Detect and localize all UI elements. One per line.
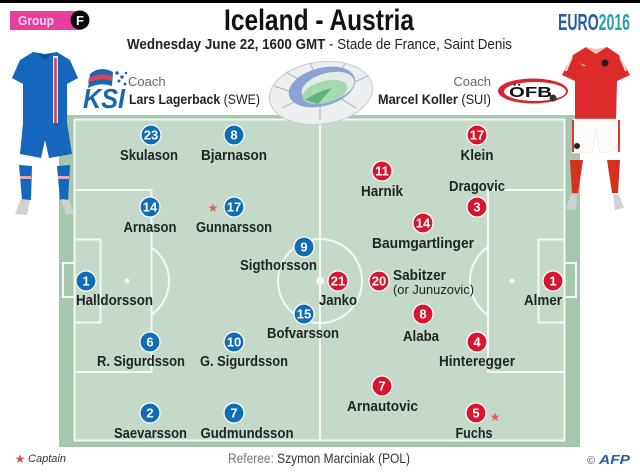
group badge [10, 10, 90, 30]
icon: captain star: ★ [208, 201, 218, 215]
logo: KSI: KSI [83, 83, 126, 114]
player: Klein: Klein [460, 148, 494, 164]
player: Sigthorsson [240, 237, 317, 274]
player: Janko: Janko [319, 293, 357, 309]
player: Bofvarsson: Bofvarsson [267, 326, 339, 342]
player: Bjarnason: Bjarnason [201, 148, 267, 164]
football pitch [59, 115, 580, 447]
legend: captain: Captain [28, 453, 66, 465]
referee: Referee: Szymon Marciniak (POL) [228, 451, 410, 466]
player: R. Sigurdsson [97, 332, 185, 370]
player: Alaba: Alaba [403, 329, 440, 345]
logo: OFB [498, 78, 568, 104]
team: Iceland [76, 125, 339, 442]
player: Saevarsson: Saevarsson [114, 426, 187, 442]
player: Gudmundsson: Gudmundsson [200, 426, 294, 442]
player: Gunnarsson: 17 [227, 200, 241, 214]
player: G. Sigurdsson [200, 332, 288, 370]
match details: Wednesday June 22, 1600 GMT - Stade de France, Saint Denis [127, 36, 512, 53]
player: R. Sigurdsson: 6 [146, 334, 154, 350]
kit: Austria [562, 47, 630, 210]
player: Almer: Almer [524, 293, 562, 309]
player: Fuchs: 5 [472, 406, 480, 420]
team: Austria [319, 125, 563, 442]
player: Almer: 1 [549, 274, 557, 288]
player: Sabitzer: Sabitzer [393, 268, 446, 284]
coach: Iceland: Coach [128, 74, 166, 89]
player: Saevarsson: 2 [146, 406, 154, 420]
player: Sabitzer: 20 [372, 274, 386, 288]
player: Dragovic [449, 179, 505, 217]
logo: OFB: ÖFB [509, 84, 552, 101]
player: G. Sigurdsson: G. Sigurdsson [200, 354, 288, 370]
player: Baumgartlinger: Baumgartlinger [372, 236, 474, 252]
player: Bjarnason [201, 125, 267, 164]
credit: AFP: AFP [598, 452, 630, 467]
player: Saevarsson [114, 403, 187, 442]
group badge: Group [18, 13, 54, 28]
player: Halldorsson: 1 [82, 274, 90, 288]
player: Harnik: 11 [375, 164, 389, 178]
player: Klein [460, 125, 494, 164]
player: Hinteregger: 4 [473, 334, 481, 350]
player: Hinteregger: Hinteregger [439, 354, 515, 370]
player: Skulason: Skulason [120, 148, 178, 164]
player: Dragovic: 3 [473, 200, 481, 214]
player: Gudmundsson: 7 [230, 406, 238, 420]
credit: AFP: © [587, 455, 595, 467]
player: Arnason: Arnason [124, 220, 176, 236]
player: G. Sigurdsson: 10 [227, 334, 241, 350]
group badge: F [76, 13, 84, 28]
player: Alaba [403, 304, 440, 345]
player: R. Sigurdsson: R. Sigurdsson [97, 354, 185, 370]
logo: KSI [83, 69, 127, 114]
player: Arnautovic: 7 [378, 378, 386, 394]
coach: Austria [378, 74, 491, 107]
credit: AFP [587, 452, 630, 467]
player: Baumgartlinger [372, 213, 474, 252]
player: Skulason [120, 125, 178, 164]
player: Arnason: 14 [143, 200, 158, 214]
player: Arnautovic: Arnautovic [347, 399, 418, 415]
player: Harnik: Harnik [361, 184, 404, 200]
player: Halldorsson: Halldorsson [76, 293, 153, 309]
player: Almer [524, 271, 563, 309]
player: Harnik [361, 161, 404, 200]
player: Fuchs [456, 403, 492, 442]
player: Skulason: 23 [144, 128, 158, 142]
icon: captain star: ★ [490, 410, 500, 424]
coach: Austria: Marcel Koller (SUI) [378, 92, 491, 107]
coach: Iceland: Lars Lagerback (SWE) [129, 92, 260, 107]
player: Janko: 21 [331, 274, 345, 288]
player: Hinteregger [439, 332, 515, 370]
player: Klein: 17 [470, 128, 484, 142]
coach: Iceland [128, 74, 260, 107]
player: Arnason [124, 197, 176, 236]
player: Bofvarsson: 15 [297, 306, 311, 322]
player: Arnautovic [347, 376, 418, 415]
player: Gudmundsson [200, 403, 294, 442]
legend: captain [15, 452, 66, 466]
player: Sigthorsson: 9 [300, 240, 308, 254]
player: Alaba: 8 [419, 306, 427, 322]
player: Sabitzer [369, 268, 474, 297]
player: Gunnarsson: Gunnarsson [196, 220, 272, 236]
player: Dragovic: Dragovic [449, 179, 505, 195]
player: Fuchs: Fuchs [456, 426, 492, 442]
stadium [265, 55, 377, 131]
player: Janko [319, 271, 357, 309]
player: Sigthorsson: Sigthorsson [240, 258, 317, 274]
title: Iceland - Austria [224, 4, 414, 37]
player: Baumgartlinger: 14 [416, 216, 431, 230]
legend: captain: ★ [15, 452, 25, 466]
player: Gunnarsson [196, 197, 272, 236]
player: Bjarnason: 8 [230, 128, 238, 142]
kit: Iceland [12, 52, 78, 215]
player: Bofvarsson [267, 304, 339, 342]
player: Halldorsson [76, 271, 153, 309]
coach: Austria: Coach [453, 74, 491, 89]
player: Sabitzer: (or Junuzovic) [393, 282, 474, 297]
